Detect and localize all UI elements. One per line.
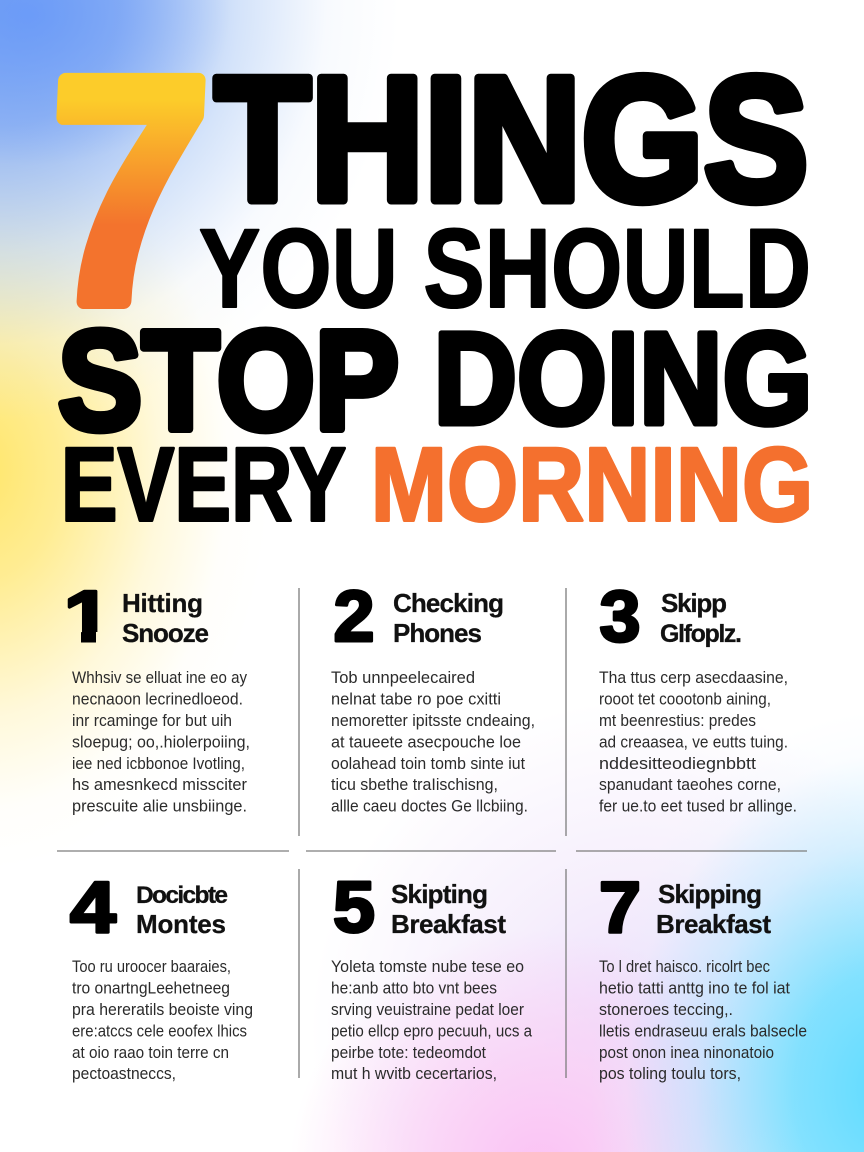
infographic canvas — [56, 72, 809, 1082]
number 3: 3 — [600, 577, 640, 657]
heading: Checking Phones: Checking — [393, 588, 504, 618]
body text — [331, 669, 535, 816]
heading: Docicbte Montes: Montes — [136, 909, 226, 939]
heading: Skipp Glfoplz.: Skipp — [661, 588, 727, 618]
number 2: 2 — [334, 577, 374, 657]
body text: Too ru uroocer baaraies, — [72, 958, 231, 976]
body text: Yoleta tomste nube tese eo — [331, 958, 524, 976]
heading: Checking Phones: Phones — [393, 618, 482, 648]
body text — [599, 669, 797, 816]
heading: Skipp Glfoplz. — [660, 588, 742, 648]
heading: Skipping Breakfast: Breakfast — [656, 909, 771, 939]
panel: item 4 — [70, 868, 253, 1083]
body text: prescuite alie unsbiinge. — [72, 798, 247, 816]
number 5: 5 — [333, 868, 375, 948]
panel: item 6 — [599, 868, 807, 1083]
number 4: 4 — [70, 868, 116, 948]
heading: Skipting Breakfast: Skipting — [391, 879, 488, 909]
title line: THINGS: THINGS — [214, 40, 808, 238]
heading: Skipting Breakfast — [391, 879, 506, 939]
body text: To l dret haisco. ricolrt bec — [599, 958, 770, 976]
body text: at taueete asecpouche loe — [331, 734, 521, 752]
heading: Skipting Breakfast: Breakfast — [391, 909, 506, 939]
body text: nddesitteodiegnbbtt — [599, 755, 756, 773]
body text: peirbe tote: tedeomdot — [331, 1044, 486, 1062]
body text: he:anb atto bto vnt bees — [331, 980, 497, 998]
body text: allle caeu doctes Ge llcbiing. — [331, 798, 528, 816]
body text: ere:atccs cele eoofex lhics — [72, 1022, 247, 1040]
panel: item 2 — [331, 577, 535, 816]
number 7: 7 — [599, 868, 641, 948]
body text — [72, 669, 250, 816]
title word: STOP: STOP — [58, 301, 399, 459]
number 1: 1 — [64, 577, 112, 657]
body text: srving veuistraine pedat loer — [331, 1001, 524, 1019]
body text: mut h wvitb cecertarios, — [331, 1065, 497, 1083]
body text: iee ned icbbonoe Ivotling, — [72, 755, 245, 773]
panel: item 3 — [599, 577, 797, 816]
body text: hetio tatti anttg ino te fol iat — [599, 980, 790, 998]
body text: lletis endraseuu erals balsecle — [599, 1022, 807, 1040]
body text: Tob unnpeelecaired — [331, 669, 475, 687]
body text — [599, 958, 807, 1083]
heading: Hitting Snooze — [122, 588, 209, 648]
body text: oolahead toin tomb sinte iut — [331, 755, 525, 773]
body text: hs amesnkecd missciter — [72, 776, 247, 794]
panel: item 5 — [331, 868, 533, 1083]
body text: ad creaasea, ve eutts tuing. — [599, 734, 788, 752]
heading: Skipping Breakfast: Skipping — [658, 879, 762, 909]
heading: Checking Phones — [393, 588, 504, 648]
body text: necnaoon lecrinedloeod. — [72, 690, 243, 708]
heading: Skipping Breakfast — [656, 879, 771, 939]
body text: petio ellcp epro pecuuh, ucs a — [331, 1022, 533, 1040]
heading: Hitting Snooze: Snooze — [122, 618, 209, 648]
body text: Whhsiv se elluat ine eo ay — [72, 669, 248, 687]
body text: pra hereratils beoiste ving — [72, 1001, 253, 1019]
body text: rooot tet coootonb aining, — [599, 690, 771, 708]
body text: pectoastneccs, — [72, 1065, 176, 1083]
body text: nelnat tabe ro poe cxitti — [331, 690, 501, 708]
body text: inr rcaminge for but uih — [72, 712, 232, 730]
body text: tro onartngLeehetneeg — [72, 980, 230, 998]
title word: DOING: DOING — [434, 304, 812, 452]
body text: spanudant taeohes corne, — [599, 776, 781, 794]
title — [40, 11, 813, 543]
body text: sloepug; oo,.hiolerpoiing, — [72, 734, 250, 752]
body text: ticu sbethe traIischisng, — [331, 776, 498, 794]
body text: Tha ttus cerp asecdaasine, — [599, 669, 788, 687]
title word: EVERY: EVERY — [61, 426, 346, 544]
body text: stoneroes teccing,. — [599, 1001, 733, 1019]
body text — [331, 958, 533, 1083]
body text: post onon inea ninonatoio — [599, 1044, 774, 1062]
panel: item 1 — [64, 577, 250, 816]
title word: MORNING: MORNING — [371, 426, 813, 544]
body text — [72, 958, 253, 1083]
body text: fer ue.to eet tused br allinge. — [599, 798, 797, 816]
heading: Docicbte Montes: Docicbte — [136, 882, 228, 909]
heading: Docicbte Montes — [136, 882, 228, 939]
body text: nemoretter ipitsste cndeaing, — [331, 712, 535, 730]
heading: Hitting Snooze: Hitting — [122, 588, 203, 618]
body text: at oio raao toin terre cn — [72, 1044, 229, 1062]
body text: pos toling toulu tors, — [599, 1065, 741, 1083]
heading: Skipp Glfoplz.: Glfoplz. — [660, 620, 742, 648]
title numeral 7: 7 — [40, 11, 214, 369]
body text: mt beenrestius: predes — [599, 712, 756, 730]
